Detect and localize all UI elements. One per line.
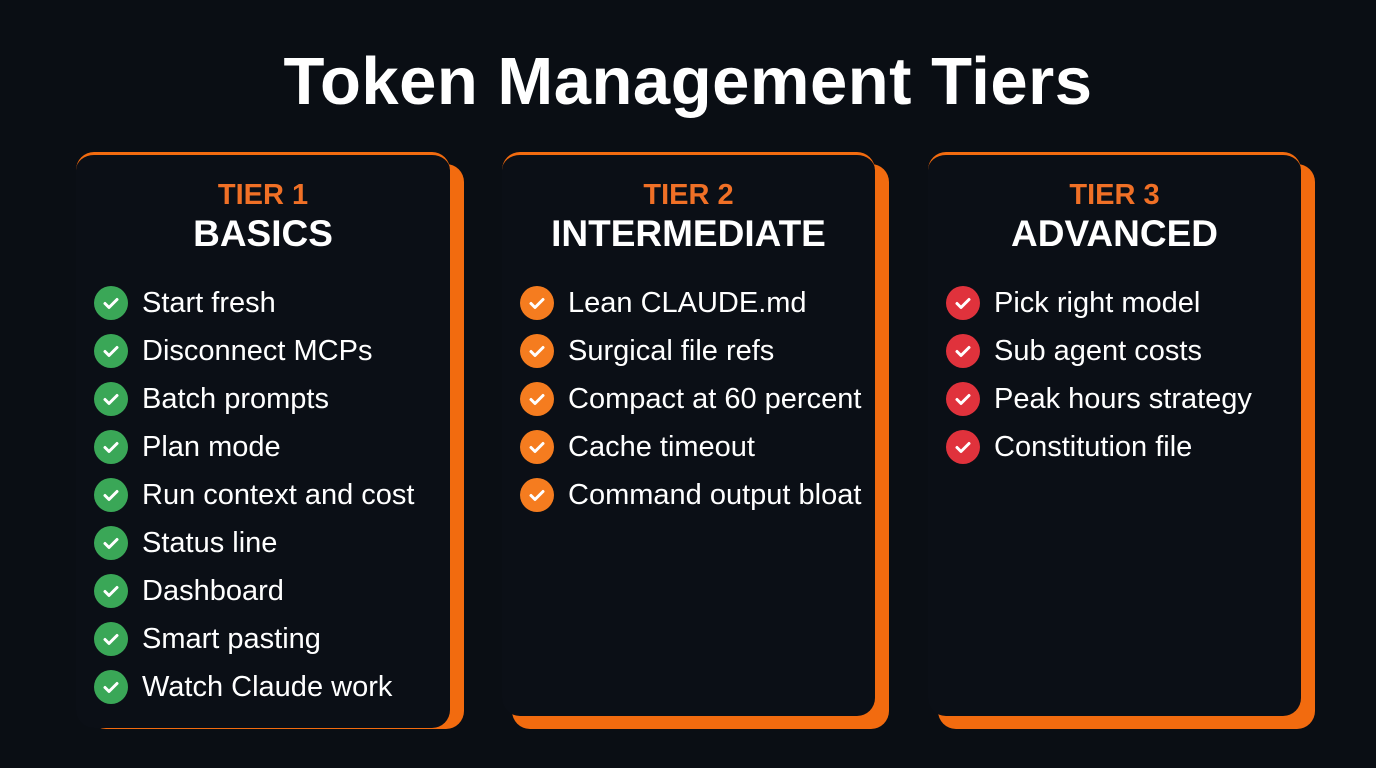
- panel: tier 2: [502, 152, 889, 729]
- list: basics items: Status line: [142, 526, 277, 558]
- list: basics items: Plan mode: [142, 430, 281, 462]
- list: basics items: Dashboard: [142, 574, 284, 606]
- list: intermediate items: Command output bloat: [568, 478, 861, 510]
- list: advanced items: Constitution file: [994, 430, 1192, 462]
- panel: tier 3: [928, 152, 1315, 729]
- list: intermediate items: Cache timeout: [568, 430, 755, 462]
- list: intermediate items: [520, 286, 862, 512]
- heading: basics: BASICS: [193, 213, 333, 254]
- list: basics items: Smart pasting: [142, 622, 321, 654]
- list: basics items: Start fresh: [142, 286, 276, 318]
- label: tier 3: TIER 3: [1069, 179, 1160, 211]
- list: basics items: [94, 286, 414, 704]
- list: advanced items: [946, 286, 1252, 464]
- list: intermediate items: Surgical file refs: [568, 334, 774, 366]
- list: basics items: Batch prompts: [142, 382, 329, 414]
- list: basics items: Disconnect MCPs: [142, 334, 372, 366]
- heading: advanced: ADVANCED: [1011, 213, 1218, 254]
- list: basics items: Watch Claude work: [142, 670, 392, 702]
- list: basics items: Run context and cost: [142, 478, 414, 510]
- heading: intermediate: INTERMEDIATE: [551, 213, 826, 254]
- list: advanced items: Sub agent costs: [994, 334, 1202, 366]
- list: advanced items: Peak hours strategy: [994, 382, 1252, 414]
- label: tier 2: TIER 2: [643, 179, 734, 211]
- panel: tier 1: [76, 152, 464, 729]
- title: Token Management Tiers: [283, 44, 1092, 119]
- list: intermediate items: Compact at 60 percent: [568, 382, 861, 414]
- list: intermediate items: Lean CLAUDE.md: [568, 286, 807, 318]
- label: tier 1: TIER 1: [218, 179, 308, 211]
- list: advanced items: Pick right model: [994, 286, 1200, 318]
